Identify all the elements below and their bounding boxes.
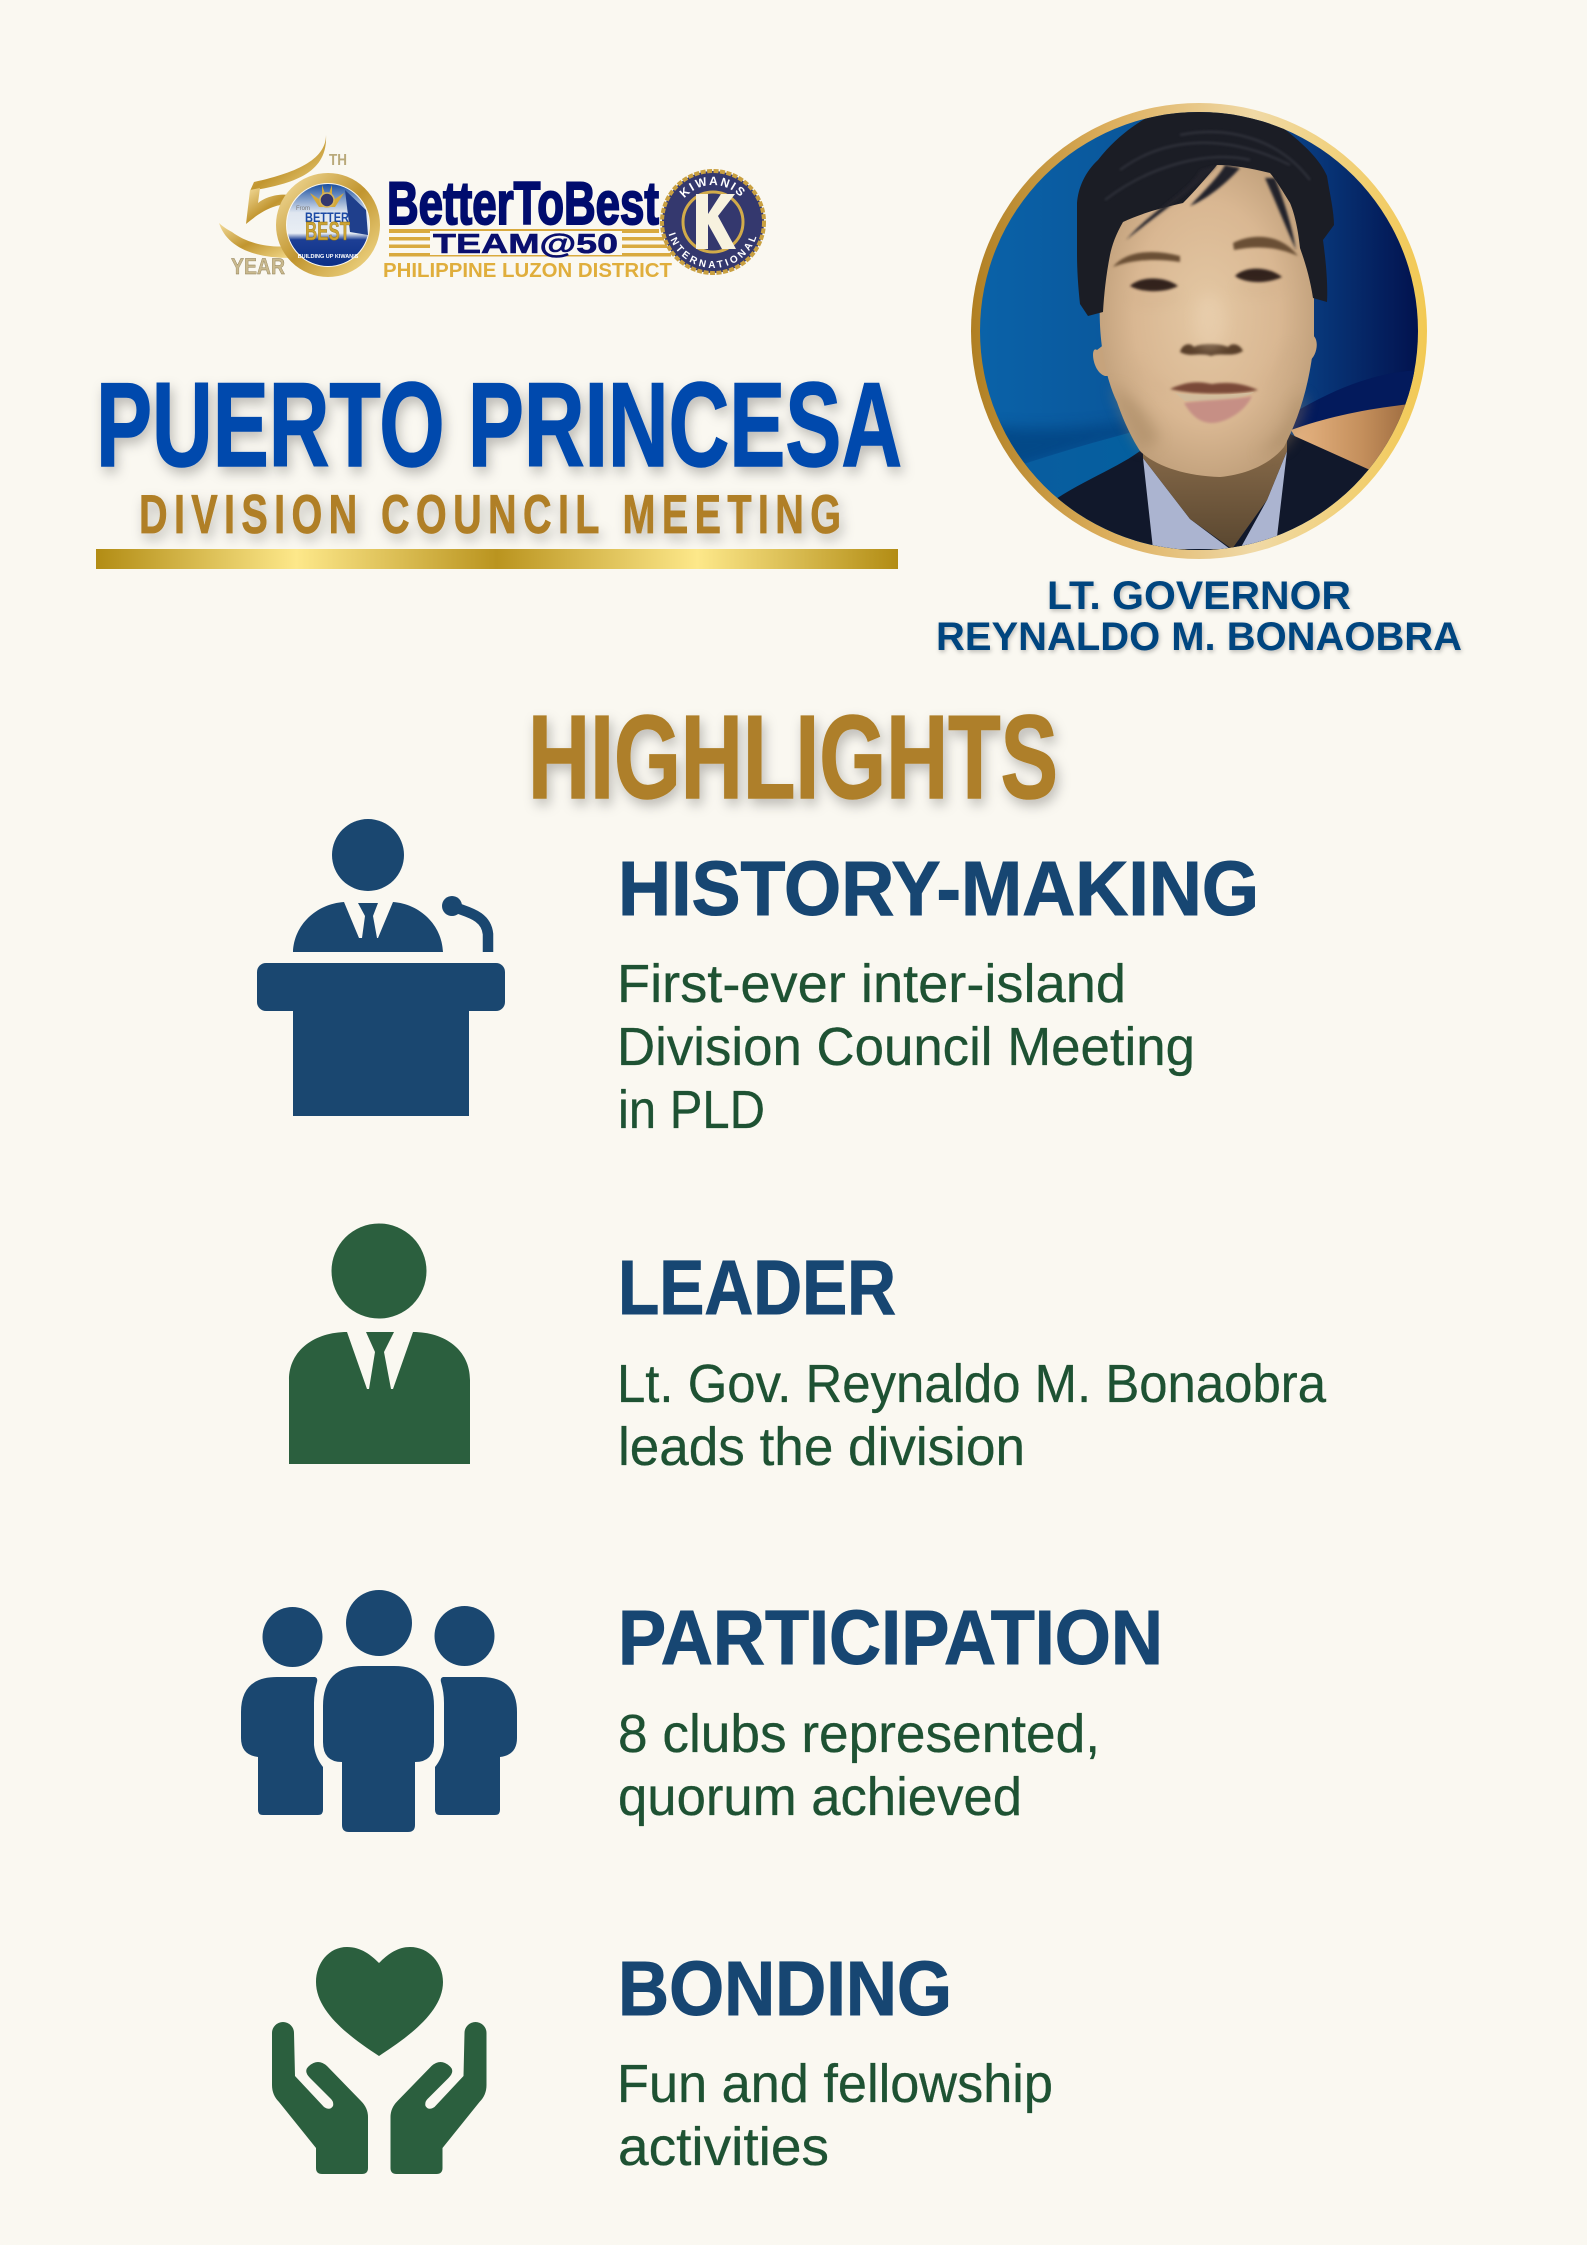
shirt collar (1143, 451, 1287, 549)
logo text: TEAM@50: TEAM@50 (433, 228, 618, 259)
icon: leader in suit (289, 1224, 470, 1464)
subtitle: Division Council Meeting: DIVISION COUNCIL MEETING (139, 485, 841, 546)
neck (1143, 441, 1287, 548)
logo group: anniversary and team logos (219, 136, 766, 282)
body text: Participation: quorum achieved (618, 1767, 1022, 1827)
icon: Kiwanis International seal (660, 169, 766, 275)
heading: Leader: LEADER (618, 1245, 896, 1331)
body text: History-Making: First-ever inter-island (617, 954, 1126, 1014)
suit (1058, 434, 1369, 550)
caption: Lt. Governor name (936, 574, 1462, 659)
title: Puerto Princesa: PUERTO PRINCESA (96, 358, 902, 492)
body text: Participation (618, 1704, 1100, 1827)
logo text: BetterToBest: BetterToBest (387, 170, 659, 237)
caption line: title: LT. GOVERNOR (1047, 574, 1351, 618)
body text: History-Making (617, 954, 1195, 1140)
nose (1180, 344, 1243, 356)
portrait: Lt. Governor photo in gold ring (971, 103, 1427, 560)
emblem text: YEAR: YEAR (231, 254, 285, 279)
logo stripes (389, 229, 671, 256)
face (1100, 150, 1314, 477)
emblem text: from better to best: From (296, 206, 310, 212)
body text: Bonding: activities (618, 2117, 829, 2177)
heading: Participation: PARTICIPATION (618, 1595, 1163, 1681)
gold divider bar (96, 549, 898, 569)
body text: Leader (617, 1354, 1327, 1477)
eyebrows (1113, 237, 1298, 267)
body text: Leader: leads the division (618, 1417, 1025, 1477)
heading: History-Making: HISTORY-MAKING (618, 846, 1259, 932)
right navy band (1290, 370, 1420, 430)
body text: Participation: 8 clubs represented, (618, 1704, 1100, 1764)
emblem text: from better to best: BEST (305, 216, 350, 246)
icon: 50th year anniversary emblem (219, 135, 375, 279)
section: Leader (617, 1245, 1327, 1477)
icon: group of three people (241, 1590, 517, 1832)
logo text: Philippine Luzon District: PHILIPPINE LUZON DISTRICT (383, 259, 672, 282)
body text: Leader: Lt. Gov. Reynaldo M. Bonaobra (617, 1354, 1327, 1414)
body text: History-Making: in PLD (618, 1080, 765, 1140)
emblem text: TH: TH (329, 152, 347, 169)
ears (1093, 334, 1317, 376)
icon: speaker at podium (257, 819, 505, 1116)
hair fringe strands (1126, 165, 1296, 250)
hair highlights (1105, 132, 1310, 200)
section: History-Making (617, 846, 1259, 1140)
section: Bonding (617, 1946, 1053, 2177)
body text: Bonding (617, 2054, 1053, 2177)
heading: Bonding: BONDING (618, 1946, 952, 2032)
lower left blue swoosh (1000, 420, 1130, 467)
emblem text: from better to best (296, 206, 359, 260)
icon: heart held by hands (272, 1947, 486, 2174)
jaw shadow (1112, 385, 1306, 455)
emblem text: from better to best: BETTER (305, 209, 349, 225)
hair (1077, 109, 1334, 316)
section: Participation (618, 1595, 1163, 1827)
seal text: KIWANIS: KIWANIS (679, 176, 745, 198)
caption line: name: REYNALDO M. BONAOBRA (936, 615, 1462, 659)
copper swoosh (1292, 404, 1406, 470)
emblem text: from better to best: BUILDING UP KIWANIS (298, 254, 359, 260)
seal text: INTERNATIONAL: INTERNATIONAL (668, 232, 756, 268)
lips (1170, 382, 1258, 394)
eyes (1130, 269, 1282, 291)
body text: Bonding: Fun and fellowship (617, 2054, 1053, 2114)
heading: Highlights: HIGHLIGHTS (528, 691, 1058, 824)
body text: History-Making: Division Council Meeting (617, 1017, 1195, 1077)
